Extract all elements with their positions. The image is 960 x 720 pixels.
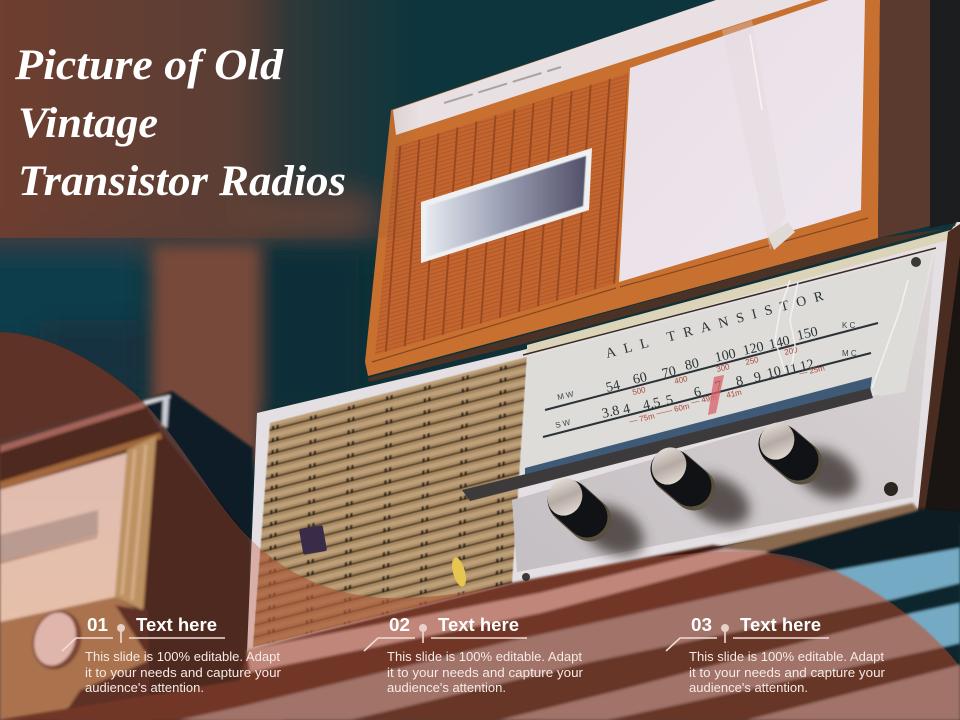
heading 01: Text here xyxy=(136,615,217,635)
dial text: — 25m xyxy=(798,363,826,378)
dark streak 2 xyxy=(607,643,960,720)
dial text: 200 xyxy=(783,345,799,357)
background: blurred shelf xyxy=(0,0,954,486)
dark streak 1 xyxy=(350,583,960,720)
shelf tint under overlay xyxy=(182,568,960,720)
dial text: 70 xyxy=(661,364,678,382)
dial text: 10 xyxy=(766,364,783,382)
darkening behind wave xyxy=(0,332,142,460)
outer frame xyxy=(247,222,960,652)
dial text: 4.5 xyxy=(642,395,662,414)
dial text: 8 xyxy=(735,374,745,390)
dial text: 11 xyxy=(783,361,799,379)
item 03 xyxy=(666,615,885,695)
body 01 xyxy=(85,650,281,695)
dial text: M C xyxy=(842,349,857,358)
dial text: 300 xyxy=(715,362,731,374)
control plate xyxy=(512,252,935,572)
title: Picture of Old xyxy=(14,42,285,89)
body 02: This slide is 100% editable. Adapt xyxy=(387,650,583,664)
streak tint under overlay xyxy=(360,602,958,720)
dial text: 4 xyxy=(622,402,632,418)
dial text xyxy=(554,289,857,430)
knob 3 xyxy=(754,417,866,509)
cream top strip xyxy=(393,0,812,135)
dial text: 400 xyxy=(673,374,689,386)
item 01 xyxy=(62,615,281,695)
bottom wave overlay xyxy=(0,332,960,720)
connector lines xyxy=(364,624,527,651)
dial text: 6 xyxy=(693,385,703,401)
dial text: 80 xyxy=(684,356,701,374)
body 02: audience's attention. xyxy=(387,681,506,695)
title: Transistor Radios xyxy=(18,158,346,205)
woven speaker grille xyxy=(253,357,527,647)
title: Vintage xyxy=(18,100,158,147)
dial text: M W xyxy=(556,389,575,402)
grille tint under wave xyxy=(253,548,490,647)
dial text: 41m xyxy=(725,388,743,400)
dial text: 500 xyxy=(631,385,647,397)
dial text: 54 xyxy=(605,378,622,396)
body 01: This slide is 100% editable. Adapt xyxy=(85,650,281,664)
dial text: — 49m xyxy=(690,392,718,407)
shadow under radio xyxy=(763,508,960,572)
tuning window xyxy=(421,148,592,263)
upper radio xyxy=(365,0,960,376)
knob 2 xyxy=(646,442,758,536)
screw xyxy=(884,482,898,496)
body 03: it to your needs and capture your xyxy=(689,666,885,680)
body 03 xyxy=(689,650,885,695)
wood frame xyxy=(0,545,827,720)
body 01: it to your needs and capture your xyxy=(85,666,281,680)
radio body xyxy=(365,0,880,376)
dial text: 7 xyxy=(714,379,724,395)
item 02 xyxy=(364,615,583,695)
shelf xyxy=(0,503,960,720)
dial text: 12 xyxy=(799,357,816,375)
torn tape xyxy=(722,20,786,250)
dial text: 250 xyxy=(744,355,760,367)
dial text: 9 xyxy=(753,370,763,386)
top title band xyxy=(0,0,420,238)
number 02: 02 xyxy=(389,615,410,635)
left radio xyxy=(0,391,330,720)
speaker grille xyxy=(375,73,628,355)
heading 02: Text here xyxy=(438,615,519,635)
title xyxy=(14,42,346,205)
rust edge of radio xyxy=(713,503,918,552)
dark side xyxy=(878,0,930,238)
scale lines xyxy=(545,323,878,410)
dial text: — 75m xyxy=(628,411,656,426)
lower radio xyxy=(247,220,960,652)
connector lines xyxy=(666,624,829,651)
knob 1 xyxy=(542,473,652,566)
dial text: 120 xyxy=(742,340,765,359)
body 01: audience's attention. xyxy=(85,681,204,695)
far right dark xyxy=(930,0,960,228)
body 03: This slide is 100% editable. Adapt xyxy=(689,650,885,664)
red tuning mark xyxy=(708,375,724,415)
heading 03: Text here xyxy=(740,615,821,635)
number 01: 01 xyxy=(87,615,108,635)
yellow tag xyxy=(449,556,469,588)
body 02 xyxy=(387,650,583,695)
body 03: audience's attention. xyxy=(689,681,808,695)
dial text: ALL TRANSISTOR xyxy=(604,289,826,362)
dial text: 3.8 xyxy=(601,403,621,422)
dial text: 100 xyxy=(714,347,737,366)
dial text: —— 60m xyxy=(655,402,691,418)
dial text: K C xyxy=(842,321,856,330)
dial text: S W xyxy=(554,418,572,430)
dial text: 140 xyxy=(768,334,791,353)
screw xyxy=(911,257,921,267)
number 03: 03 xyxy=(691,615,712,635)
dial panel xyxy=(520,252,932,473)
maker label xyxy=(444,67,561,103)
body 02: it to your needs and capture your xyxy=(387,666,583,680)
dial text: 150 xyxy=(796,325,819,344)
pink trim xyxy=(247,548,770,672)
dark pointer bar xyxy=(462,388,873,501)
dial text: 5 xyxy=(665,393,675,409)
screw xyxy=(522,573,530,581)
white label panel xyxy=(619,0,865,282)
dial text: 60 xyxy=(632,370,649,388)
blue shelf xyxy=(180,548,960,720)
cracks on dial xyxy=(775,280,908,388)
small badge xyxy=(299,525,327,555)
connector lines xyxy=(62,624,225,651)
